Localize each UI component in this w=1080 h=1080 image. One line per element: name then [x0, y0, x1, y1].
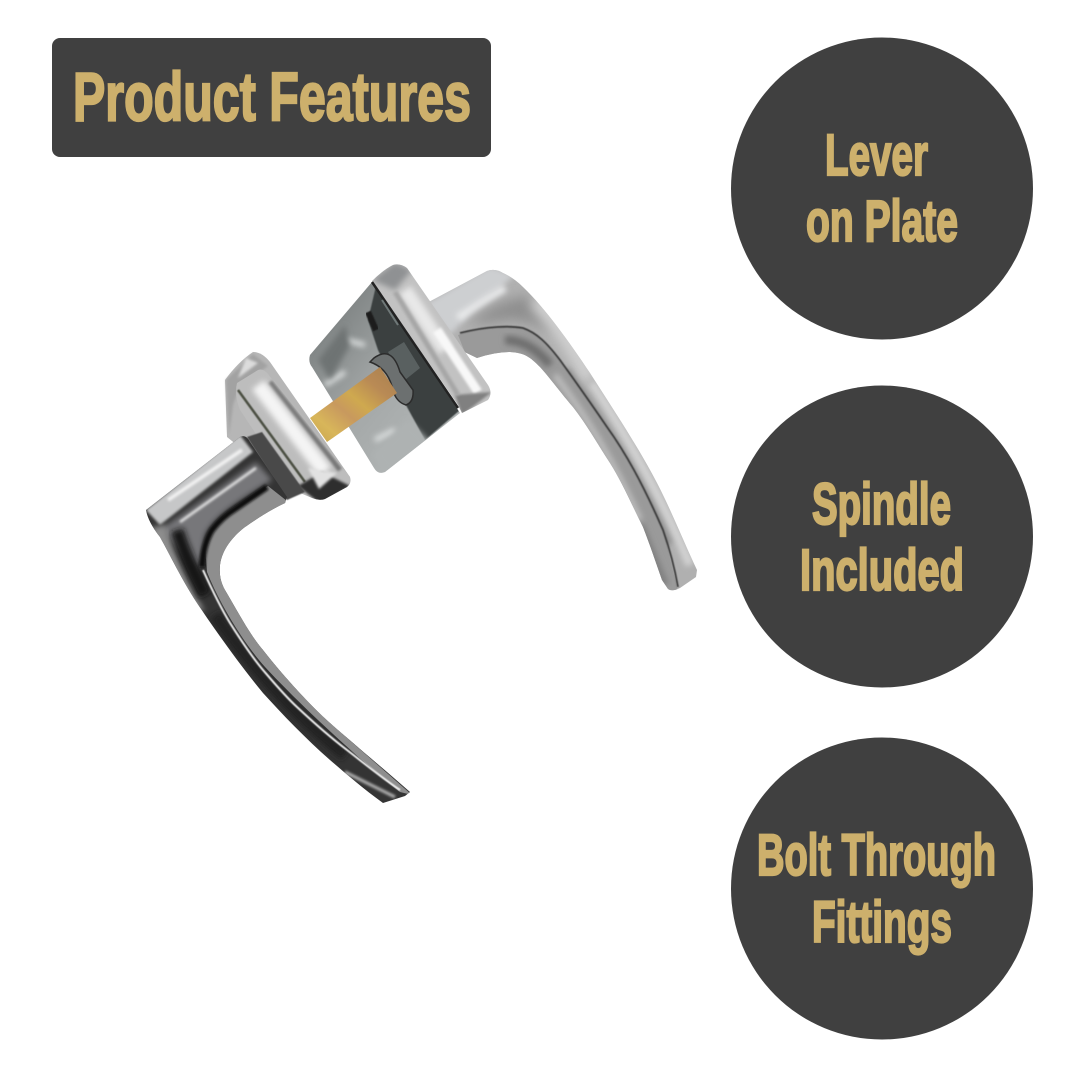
feature circle: spindle included — [731, 386, 1033, 688]
plate interior — [309, 282, 460, 473]
feature circle: lever on plate — [731, 38, 1033, 340]
feature circle: spindle included: Included — [800, 538, 964, 603]
title text: Product Features — [73, 58, 471, 136]
spindle — [310, 367, 397, 442]
feature circle: bolt through fittings: Fittings — [812, 890, 952, 955]
feature circle: spindle included: Spindle — [812, 472, 951, 537]
spindle fixing — [388, 342, 420, 380]
left lever handle — [146, 432, 412, 803]
feature circle: lever on plate: Lever — [825, 123, 928, 188]
product photo: door lever handle set — [146, 262, 697, 803]
feature circle: lever on plate: on Plate — [806, 189, 958, 254]
title banner — [52, 38, 491, 157]
right lever handle — [425, 266, 697, 600]
right rose plate — [309, 262, 492, 475]
feature circle: bolt through fittings — [731, 738, 1033, 1040]
left rose plate — [225, 352, 351, 505]
